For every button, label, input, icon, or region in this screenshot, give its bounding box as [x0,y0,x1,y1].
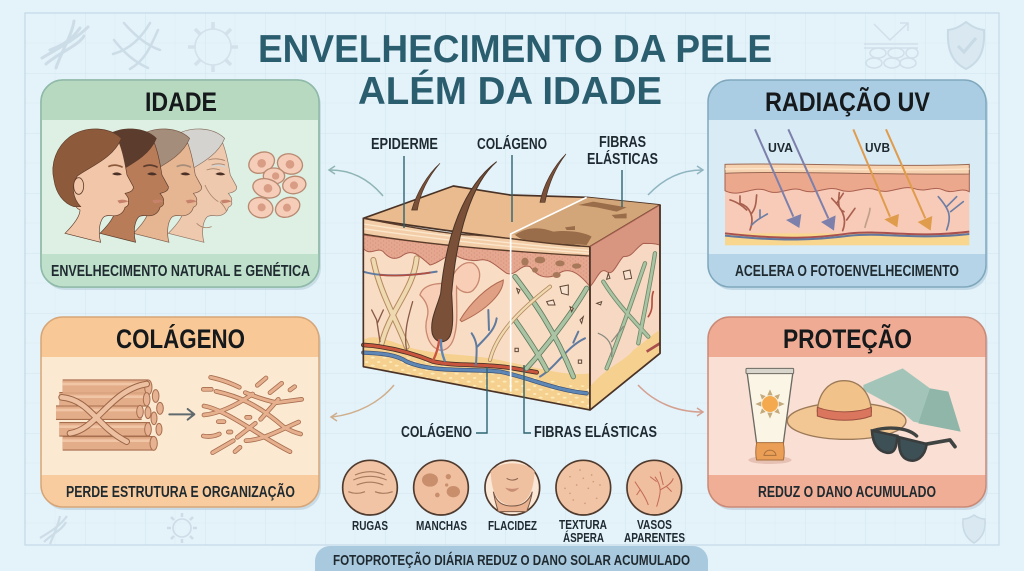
heading: colágeno: COLÁGENO [116,323,245,354]
icon: shield watermark [948,22,984,69]
elastic fibers left [363,258,437,350]
illustration: skin cross-section [725,164,969,245]
label: epiderme [371,136,438,228]
sign: manchas [414,460,468,533]
sign: textura áspera: ÁSPERA [563,530,604,545]
title: ENVELHECIMENTO DA PELE [258,28,772,71]
label: colágeno top: COLÁGENO [477,136,547,153]
arrows: uvb [853,129,932,231]
panel: radiação uv [708,80,988,290]
right side face [590,205,660,410]
label: epiderme: EPIDERME [371,136,438,153]
panel: proteção [708,317,988,510]
sign: flacidez: FLACIDEZ [488,519,537,533]
label: fibras elásticas bottom: FIBRAS ELÁSTICAS [534,424,657,441]
arrow: to colágeno [331,385,394,421]
sign: rugas: RUGAS [352,519,388,533]
bottom banner [315,546,708,571]
label: fibras elásticas bottom [524,365,657,441]
illustration: intact collagen bundle [56,380,163,450]
panel: idade [41,80,321,290]
hair with follicle [412,154,566,350]
title [258,28,772,113]
panel: colágeno [41,317,321,510]
label: colágeno top [477,136,547,222]
illustration: sunscreen tube [746,368,794,464]
illustration: towel [863,368,961,432]
top face [363,186,660,247]
blood vessels [363,310,587,393]
fragments [515,270,632,363]
sign: vasos aparentes: VASOS [637,518,672,532]
white divider line [511,197,587,392]
label: colágeno bottom [401,367,487,441]
arrow: to proteção [638,385,703,416]
icon: sun watermark bottom [167,513,197,543]
heading: idade: IDADE [145,87,217,117]
caption: proteção: REDUZ O DANO ACUMULADO [758,484,936,501]
title: ALÉM DA IDADE [358,69,662,113]
icon: shield watermark bottom [963,515,985,543]
damaged fibers [490,253,655,377]
sign: textura áspera: TEXTURA [559,518,607,532]
icon: skin layers watermark [864,23,918,68]
bottom outline [363,205,660,410]
central skin block diagram [363,154,660,410]
arrow: to idade [329,166,383,196]
caption: radiação: ACELERA O FOTOENVELHECIMENTO [735,263,959,280]
sign: rugas [343,460,397,533]
label: uva: UVA [768,141,793,155]
label: uvb: UVB [865,141,890,155]
front face [363,218,590,410]
label: fibras elásticas top: ELÁSTICAS [587,151,658,168]
sign: manchas: MANCHAS [416,519,467,533]
illustration: aging faces [53,129,237,242]
brown spots in dermis [521,257,581,278]
damaged top surface [510,197,660,247]
label: fibras elásticas top [587,134,658,207]
illustration: sunglasses [872,428,955,461]
sign: textura áspera [556,460,611,545]
illustration: fragmented collagen [203,377,302,453]
arrows: uva [755,129,836,231]
arrow: to radiação uv [648,166,703,195]
caption: idade: ENVELHECIMENTO NATURAL E GENÉTICA [51,263,310,280]
sign: flacidez [485,460,540,533]
icon: fibers watermark bottom [40,516,67,544]
illustration: skin cells [245,148,307,221]
heading: radiação uv: RADIAÇÃO UV [765,86,930,117]
label: fibras elásticas top: FIBRAS [599,134,646,151]
icon: collagen fibers watermark [42,21,88,68]
icon: mesh watermark [113,23,160,69]
arrow: collagen degradation [169,409,194,420]
sign: vasos aparentes: APARENTES [624,531,685,545]
caption: colágeno: PERDE ESTRUTURA E ORGANIZAÇÃO [66,483,295,501]
icon: sun watermark [188,22,238,72]
illustration: straw hat [787,381,906,439]
heading: proteção: PROTEÇÃO [783,323,912,354]
bottom banner: FOTOPROTEÇÃO DIÁRIA REDUZ O DANO SOLAR ACUMULADO [333,551,690,569]
label: colágeno bottom: COLÁGENO [401,424,472,441]
sign: vasos aparentes [624,460,685,545]
